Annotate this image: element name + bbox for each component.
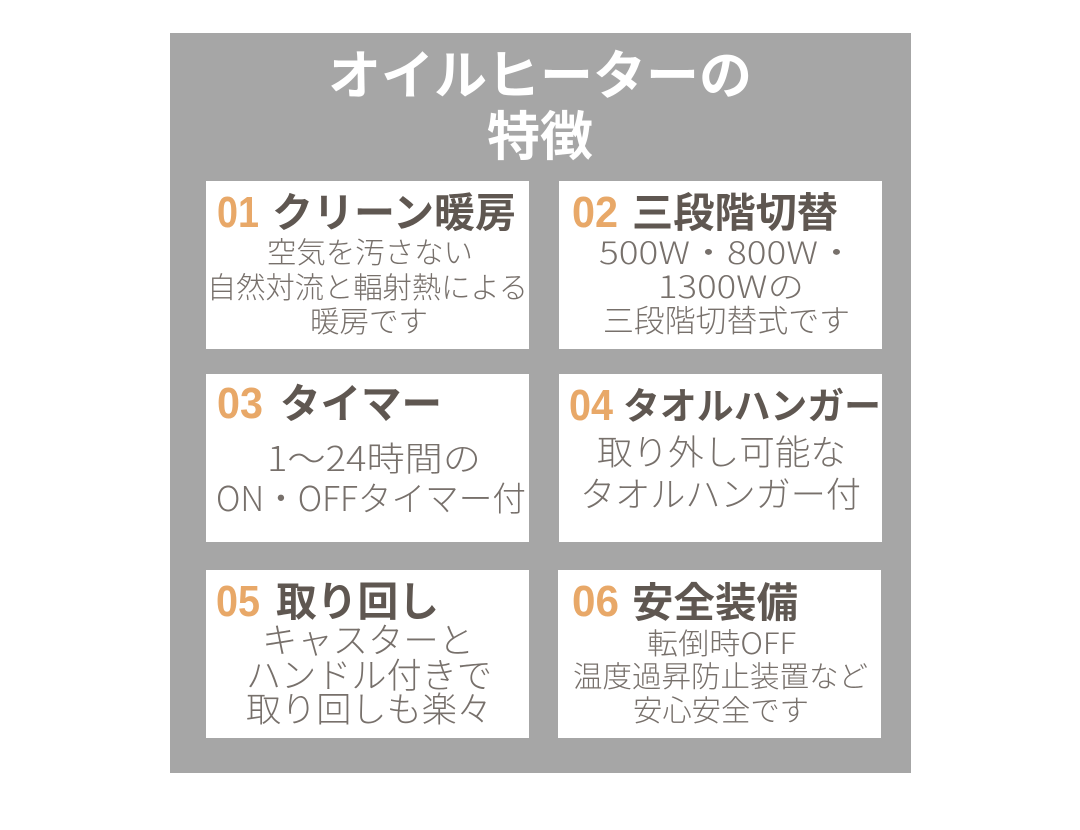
heading 06: 安全装備 (632, 569, 798, 629)
body text 04: タオルハンガー付 (580, 467, 861, 518)
heading 04: タオルハンガー (623, 376, 881, 430)
panel: 05 easy handling (206, 568, 529, 738)
number 05: 05 (216, 577, 260, 626)
panel: 04 towel hanger (559, 374, 882, 542)
body text 05: 取り回しも楽々 (246, 682, 492, 733)
heading 02: 三段階切替 (632, 179, 838, 239)
body text 01 (207, 230, 528, 341)
panel: 02 three-stage switching (559, 179, 882, 349)
panel: 01 clean heating (206, 179, 529, 349)
body text 06: 温度過昇防止装置など (573, 654, 868, 696)
number 06: 06 (572, 577, 619, 626)
body text 02: 三段階切替式です (603, 296, 850, 341)
body text 03 (216, 432, 526, 521)
body text 03: ON・OFFタイマー付 (216, 472, 526, 521)
body text 02: 1300Wの (658, 262, 804, 307)
body text 01: 自然対流と輻射熱による (207, 265, 528, 307)
body text 04: 取り外し可能な (597, 425, 846, 476)
heading 03: タイマー (280, 370, 442, 430)
number 02: 02 (572, 188, 618, 237)
heading 05: 取り回し (276, 568, 439, 628)
title: オイルヒーターの (328, 47, 752, 106)
body text 02 (599, 228, 855, 341)
body text 01: 暖房です (310, 299, 428, 341)
number 03: 03 (217, 379, 263, 428)
body text 02: 500W・800W・ (599, 228, 855, 273)
panel: 03 timer (206, 370, 529, 542)
panel: 06 safety equipment (558, 569, 881, 738)
title: 特徴 (487, 108, 593, 167)
body text 01: 空気を汚さない (267, 230, 473, 272)
body text 03: 1～24時間の (267, 432, 481, 481)
body text 06 (573, 621, 868, 730)
body text 05: ハンドル付きで (246, 648, 492, 699)
body text 05 (246, 613, 492, 733)
body text 06: 転倒時OFF (647, 621, 796, 663)
number 04: 04 (569, 381, 613, 430)
number 01: 01 (217, 188, 259, 237)
title (328, 47, 752, 167)
body text 04 (580, 425, 861, 518)
heading 01: クリーン暖房 (272, 179, 516, 239)
background panel (170, 33, 911, 773)
body text 06: 安心安全です (633, 688, 809, 730)
body text 05: キャスターと (262, 613, 474, 664)
